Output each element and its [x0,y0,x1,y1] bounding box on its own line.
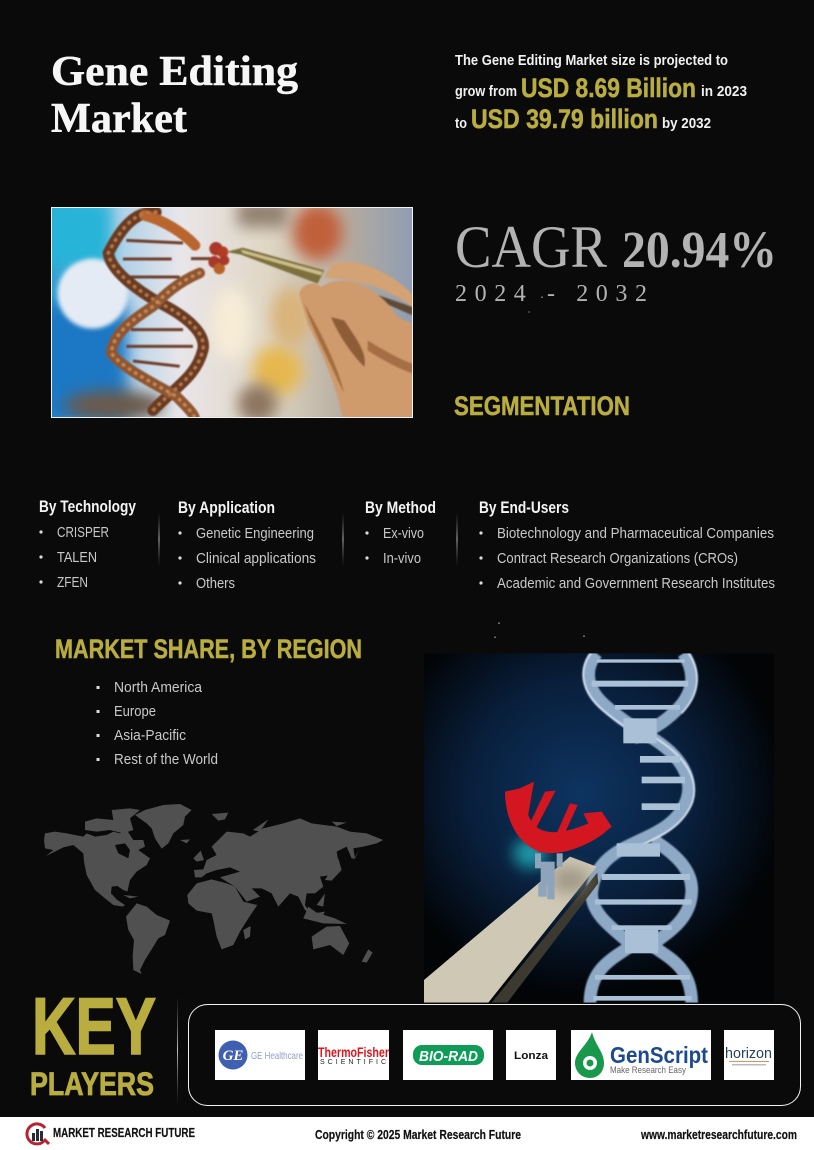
logo: GE Healthcare: GE Healthcare [251,1050,303,1062]
market size summary: by 2032 [662,115,711,132]
market size summary: USD 39.79 billion [471,104,658,134]
photo border [52,208,412,418]
logo: Horizon: horizon [725,1045,772,1062]
world map [44,804,383,974]
hand [324,262,413,307]
market size summary: USD 8.69 Billion [521,73,696,103]
glow [513,838,547,868]
segment: by technology: CRISPER [57,524,109,541]
footer [0,1117,814,1150]
photo: tweezers editing DNA [41,200,413,424]
region list: Asia-Pacific [114,727,186,744]
segment: by application: Others [196,575,235,592]
logo: Lonza [506,1030,556,1080]
market size summary: to [455,115,467,132]
DNA strands [108,212,203,417]
region list: Europe [114,703,156,720]
segment: by end-users: Academic and Government Research Institutes [497,575,775,592]
logo: Bio-Rad: BIO-RAD [419,1048,478,1065]
market share heading: MARKET SHARE, BY REGION [55,634,362,664]
market size summary: grow from [455,83,517,100]
logo: GenScript: GenScript [610,1042,708,1068]
key players heading [30,982,156,1102]
CAGR figure [455,214,777,307]
logo: GE Healthcare: GE [223,1048,243,1064]
segment: by method: By Method [365,498,436,517]
segment: by technology: By Technology [39,497,136,516]
segment: by application [178,498,316,592]
segment: by end-users: Biotechnology and Pharmaceutical Companies [497,525,774,542]
title [51,49,298,142]
logo: Thermo Fisher Scientific: SCIENTIFIC [320,1059,386,1066]
segment: by application: Genetic Engineering [196,525,314,542]
red molecule [505,782,612,853]
logo: Thermo Fisher Scientific [318,1030,390,1080]
logo: Market Research Future [27,1124,195,1144]
segment: by end-users: Contract Research Organizations (CROs) [497,550,738,567]
segmentation heading: SEGMENTATION [454,391,630,421]
region list [96,679,218,768]
CAGR figure: 2024 - 2032 [455,281,647,307]
decorative specks [494,296,584,638]
DNA rungs [123,240,211,366]
red fragment [208,242,229,274]
CAGR figure: CAGR [455,214,607,280]
segment: by application: Clinical applications [196,550,316,567]
segment: by end-users: By End-Users [479,498,569,517]
segment: by application: By Application [178,498,275,517]
figure [535,853,563,899]
key players panel [188,1004,800,1106]
key players heading: PLAYERS [30,1066,154,1102]
segment: by method [365,498,436,567]
segment: by method: Ex-vivo [383,525,424,542]
market size summary [455,52,747,134]
logo: Thermo Fisher Scientific: ThermoFisher [318,1045,390,1060]
segment: by technology: TALEN [57,549,97,566]
segment: by end-users [479,498,775,592]
logo: Bio-Rad [403,1030,493,1080]
logo: Horizon [724,1030,774,1080]
helix strands [583,653,697,1003]
title: Market [51,96,187,142]
copyright: Copyright © 2025 Market Research Future [315,1127,521,1142]
hudson bay [115,843,130,858]
beam [424,857,597,1003]
tweezers [226,248,324,284]
segment: by technology [39,497,136,591]
market size summary: The Gene Editing Market size is projected to [455,52,728,69]
logo: GenScript: Make Research Easy [610,1065,686,1076]
photo: CRISPR figure and DNA helix [424,653,774,1003]
region list: North America [114,679,203,696]
title: Gene Editing [51,49,298,95]
logo: GenScript [571,1030,711,1080]
helix rungs [592,659,692,1001]
logo: GE Healthcare [215,1030,305,1080]
key players heading: KEY [32,982,156,1072]
market size summary: in 2023 [701,83,747,100]
segment: by method: In-vivo [383,550,421,567]
segment: by technology: ZFEN [57,574,88,591]
CAGR figure: 20.94% [622,222,777,279]
logo: Market Research Future: MARKET RESEARCH FUTURE [53,1125,195,1140]
region list: Rest of the World [114,751,218,768]
logo: Lonza: Lonza [514,1050,549,1062]
